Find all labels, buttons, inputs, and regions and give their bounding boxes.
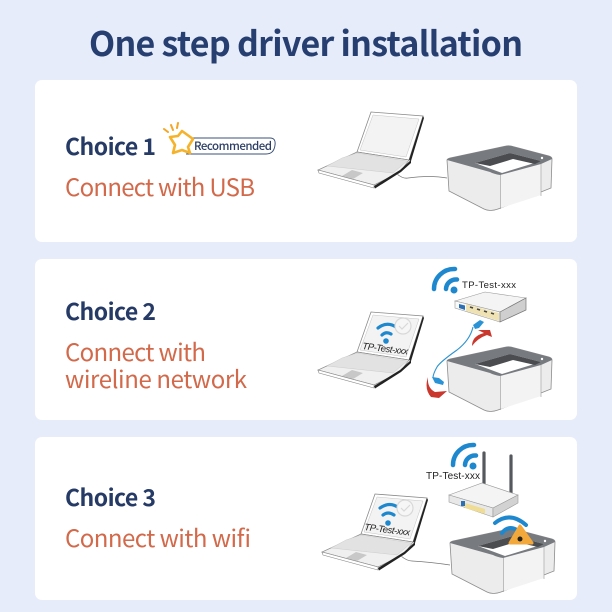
- icon: cable connector top: [473, 320, 484, 329]
- heading: choice 3: Choice 3: [65, 479, 156, 513]
- connection text: usb: Connect with USB: [65, 168, 255, 203]
- illustration: laptop: [318, 112, 424, 188]
- badge: recommended: Recommended: [194, 138, 272, 154]
- illustration: printer: [450, 529, 555, 594]
- icon: cable connector bottom: [432, 377, 444, 385]
- icon: red arrow down: [427, 377, 447, 398]
- heading: choice 1: Choice 1: [65, 128, 156, 162]
- illustration: wifi router: [426, 445, 518, 517]
- illustration: switch with wifi: [434, 269, 526, 322]
- illustration: wifi router: TP-Test-xxx: [426, 471, 480, 482]
- icon: red arrow up: [472, 330, 492, 346]
- illustration: printer: [447, 146, 552, 210]
- illustration: laptop with network name: [322, 494, 428, 570]
- illustration: laptop with network name: TP-Test-xxx: [364, 522, 412, 539]
- illustration: usb cable: [401, 556, 450, 565]
- illustration: laptop with network name: TP-Test-xxx: [362, 341, 410, 358]
- illustration: switch with wifi: TP-Test-xxx: [462, 280, 516, 291]
- panel: choice 2: wireline network: [65, 360, 247, 395]
- illustration: laptop with network name: [318, 312, 424, 388]
- illustration: network cable: [433, 327, 473, 378]
- badge: recommended: [164, 123, 275, 154]
- connection text: wifi: Connect with wifi: [65, 519, 251, 554]
- connection text: wireline network: Connect with: [65, 333, 206, 368]
- illustration: usb cable: [397, 174, 447, 178]
- panel: choice 2: [35, 259, 577, 420]
- illustration: printer: [447, 347, 552, 412]
- panel: choice 3: [35, 437, 577, 600]
- icon: printer wifi: [495, 517, 526, 533]
- panel: choice 1: [35, 80, 577, 242]
- icon: warning triangle: [510, 526, 532, 543]
- heading: choice 2: Choice 2: [65, 293, 156, 327]
- title: One step driver installation: [89, 17, 523, 66]
